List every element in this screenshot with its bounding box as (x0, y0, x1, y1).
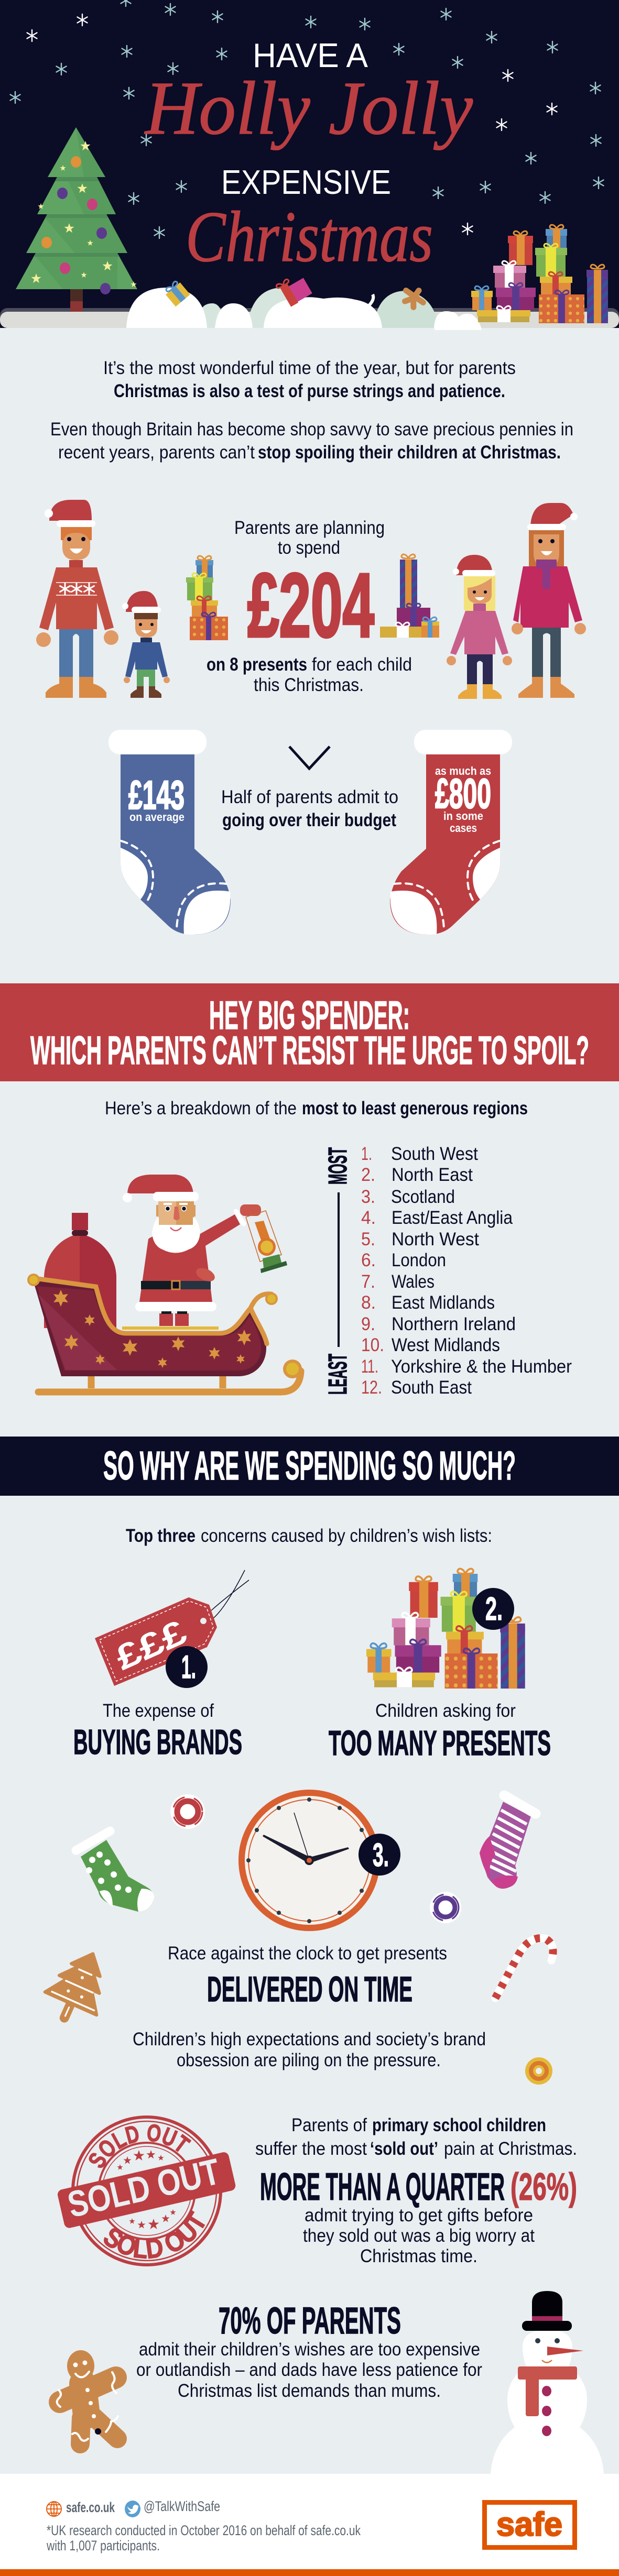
text block: on 8 presents: for each child (312, 654, 412, 675)
text block: intro: It’s the most wonderful time of the year, but for parents (103, 358, 516, 378)
list: region ranking: 6. (361, 1250, 376, 1270)
text block: gifts before sold out: admit trying to get gifts before (305, 2205, 533, 2226)
text block: buying brands: The expense of (103, 1701, 214, 1721)
stamp: sold out: SOLD OUT (64, 2151, 224, 2226)
stamp: sold out: SOLD OUT (104, 2210, 205, 2259)
title: christmas: Christmas (186, 196, 433, 277)
text block: research note: with 1,007 participants. (46, 2538, 160, 2553)
chevron (289, 747, 330, 769)
stocking: 143 pounds on average: £143 (128, 773, 184, 818)
icon: candy cane (495, 1938, 553, 1998)
text block: on 8 presents: on 8 presents (207, 654, 307, 675)
panel: header (0, 0, 619, 330)
text block: intro: stop spoiling their children at Christmas. (258, 442, 561, 463)
text block: on 8 presents (207, 654, 412, 695)
text block: primary school parents: ‘sold out’ (370, 2139, 438, 2159)
sleigh stars (53, 1290, 251, 1368)
list: region ranking: South East (391, 1377, 472, 1398)
text block: half of parents: going over their budget (222, 810, 396, 830)
list: region ranking: 2. (361, 1165, 375, 1185)
icon: price tag (95, 1570, 249, 1686)
text block: wishes too expensive: admit their children’s wishes are too expensive (139, 2339, 480, 2360)
fallen gift, pink and red (276, 271, 313, 308)
text block: parents are planning: Parents are planning (234, 518, 385, 538)
text block: delivered on time (168, 1943, 447, 2009)
text block: wishes too expensive: Christmas list demands than mums. (178, 2381, 441, 2401)
list: region ranking: 12. (361, 1377, 382, 1398)
list: region ranking: East/East Anglia (392, 1208, 513, 1228)
badge: 3: 3. (373, 1837, 389, 1873)
snow mounds (126, 288, 482, 330)
text block: research note (46, 2523, 361, 2553)
stocking: as much as 800 pounds: in some (443, 809, 483, 823)
icon: clock (242, 1793, 377, 1928)
christmas tree (16, 127, 137, 312)
panel: footer (0, 2474, 619, 2576)
text block: research note: *UK research conducted in October 2016 on behalf of safe.co.uk (47, 2523, 361, 2538)
text block: intro (50, 358, 573, 463)
small gift pile right (380, 554, 439, 638)
icon: gift pile (366, 1569, 525, 1689)
illustration: snowman (491, 2291, 604, 2474)
text block: primary school parents: suffer the most (255, 2139, 367, 2159)
stat: more than a quarter: (26%) (511, 2166, 577, 2208)
text block: delivered on time: DELIVERED ON TIME (207, 1969, 412, 2009)
text block: top three concerns: Top three (126, 1526, 196, 1546)
fallen candy cane (367, 294, 373, 307)
illustration: mum (512, 503, 586, 698)
gold ornaments on sleigh (27, 1274, 302, 1378)
list: region ranking: 10. (361, 1335, 384, 1355)
illustration: girl (447, 555, 512, 699)
fallen gingerbread man (400, 284, 427, 310)
scale: most to least: LEAST (324, 1354, 352, 1395)
list: region ranking: Wales (392, 1271, 435, 1292)
list: region ranking: 4. (361, 1208, 376, 1228)
logo: safe: safe (496, 2505, 562, 2543)
badge: 2 (472, 1588, 514, 1630)
night sky (0, 0, 619, 328)
stocking: as much as 800 pounds: as much as (435, 764, 491, 777)
stocking: as much as 800 pounds (390, 730, 512, 935)
scale: most to least (324, 1147, 352, 1395)
big number: 204 pounds: £204 (247, 554, 374, 656)
snowy ground (0, 308, 619, 328)
list: region ranking: 3. (361, 1187, 375, 1207)
text block: half of parents: Half of parents admit to (221, 787, 398, 807)
text block: breakdown intro: most to least generous regions (302, 1098, 528, 1119)
badge: 3 (359, 1834, 400, 1876)
text block: pressure (133, 2029, 486, 2070)
icon: twitter bird (125, 2501, 140, 2517)
list: region ranking: 8. (361, 1292, 376, 1313)
stamp: sold out: SOLD OUT (89, 2124, 192, 2168)
fallen gift, blue and yellow (163, 279, 190, 306)
gift pile (471, 225, 608, 323)
title: expensive: EXPENSIVE (221, 163, 391, 201)
illustration: santa on sleigh (27, 1175, 302, 1392)
stocking: as much as 800 pounds: £800 (435, 770, 491, 817)
panel: red banner: HEY BIG SPENDER: (209, 993, 410, 1038)
sleigh body (32, 1278, 266, 1376)
text block: breakdown intro: Here’s a breakdown of the (105, 1098, 297, 1119)
text block: intro: recent years, parents can’t (58, 442, 255, 463)
text block: delivered on time: Race against the clock to get presents (168, 1943, 447, 1964)
icon: yellow candy (525, 2057, 552, 2085)
text block: gifts before sold out: they sold out was a big worry at (303, 2226, 535, 2246)
stocking: 143 pounds on average (108, 730, 231, 935)
list: region ranking: West Midlands (392, 1335, 500, 1355)
icon: gingerbread man (57, 2350, 118, 2444)
logo: safe (484, 2502, 574, 2547)
text block: half of parents (221, 787, 398, 830)
small gift pile left (186, 556, 228, 640)
badge: 1: 1. (181, 1649, 196, 1685)
text block: primary school parents: pain at Christmas. (444, 2139, 577, 2159)
text block: on 8 presents: this Christmas. (254, 675, 364, 695)
text block: gifts before sold out: Christmas time. (360, 2246, 477, 2266)
icon: green stocking (76, 1831, 154, 1912)
list: region ranking: 1. (361, 1144, 372, 1164)
list: region ranking: Scotland (391, 1187, 455, 1207)
link: website: safe.co.uk (66, 2500, 115, 2515)
list: region ranking: South West (391, 1144, 478, 1164)
stocking: as much as 800 pounds: cases (450, 821, 477, 835)
text block: gifts before sold out (303, 2205, 535, 2266)
text block: buying brands: BUYING BRANDS (73, 1723, 242, 1762)
panel: navy banner (0, 1437, 619, 1496)
icon: gingerbread tree (38, 1942, 119, 2030)
text block: wishes too expensive (136, 2339, 482, 2401)
list: region ranking: Yorkshire & the Humber (391, 1356, 572, 1377)
link: twitter handle: @TalkWithSafe (144, 2498, 220, 2514)
list: region ranking: 5. (361, 1229, 375, 1249)
badge: 2: 2. (485, 1591, 503, 1627)
snowflakes (10, 0, 604, 238)
icon: purple candy (430, 1892, 461, 1923)
text block: intro: Christmas is also a test of purse strings and patience. (114, 381, 505, 401)
text block: pressure: obsession are piling on the pressure. (177, 2050, 441, 2070)
text block: too many presents (329, 1701, 551, 1763)
text block: parents are planning: to spend (278, 538, 340, 558)
lantern (246, 1211, 287, 1273)
text block: top three concerns: concerns caused by children’s wish lists: (201, 1526, 492, 1546)
list: region ranking: Northern Ireland (392, 1314, 516, 1334)
title: have a: HAVE A (253, 36, 368, 74)
sleigh rim and runners (35, 1278, 301, 1392)
scale: most to least: MOST (324, 1147, 352, 1185)
stamp: sold out (58, 2115, 236, 2266)
illustration: boy (122, 591, 170, 698)
text block: primary school parents: primary school children (372, 2115, 546, 2135)
text block: buying brands (73, 1701, 242, 1762)
title: holly jolly: Holly Jolly (144, 67, 473, 150)
sack (44, 1213, 116, 1328)
text block: primary school parents (255, 2115, 577, 2159)
icon: globe (47, 2502, 61, 2516)
text block: primary school parents: Parents of (291, 2115, 367, 2135)
panel: red banner (0, 983, 619, 1081)
icon: price tag: £££ (110, 1612, 192, 1678)
text block: parents are planning (234, 518, 385, 558)
text block: pressure: Children’s high expectations and society’s brand (133, 2029, 486, 2049)
list: region ranking: 7. (361, 1271, 375, 1292)
list: region ranking: North East (392, 1165, 473, 1185)
illustration: dad (36, 500, 118, 698)
text block: breakdown intro (105, 1098, 528, 1119)
stat: 70 percent of parents: 70% OF PARENTS (219, 2300, 401, 2342)
list: region ranking: 9. (361, 1314, 375, 1334)
text block: wishes too expensive: or outlandish – and dads have less patience for (136, 2360, 482, 2380)
list: region ranking: North West (392, 1229, 479, 1249)
text block: too many presents: Children asking for (375, 1701, 516, 1721)
list: region ranking (361, 1144, 572, 1398)
santa figure (123, 1175, 261, 1326)
list: region ranking: East Midlands (392, 1292, 495, 1313)
list: region ranking: London (392, 1250, 446, 1270)
stocking: 143 pounds on average: on average (129, 810, 184, 824)
icon: red candy (170, 1794, 205, 1829)
icon: striped stocking (480, 1795, 536, 1889)
badge: 1 (166, 1646, 208, 1688)
list: region ranking: 11. (361, 1356, 378, 1377)
